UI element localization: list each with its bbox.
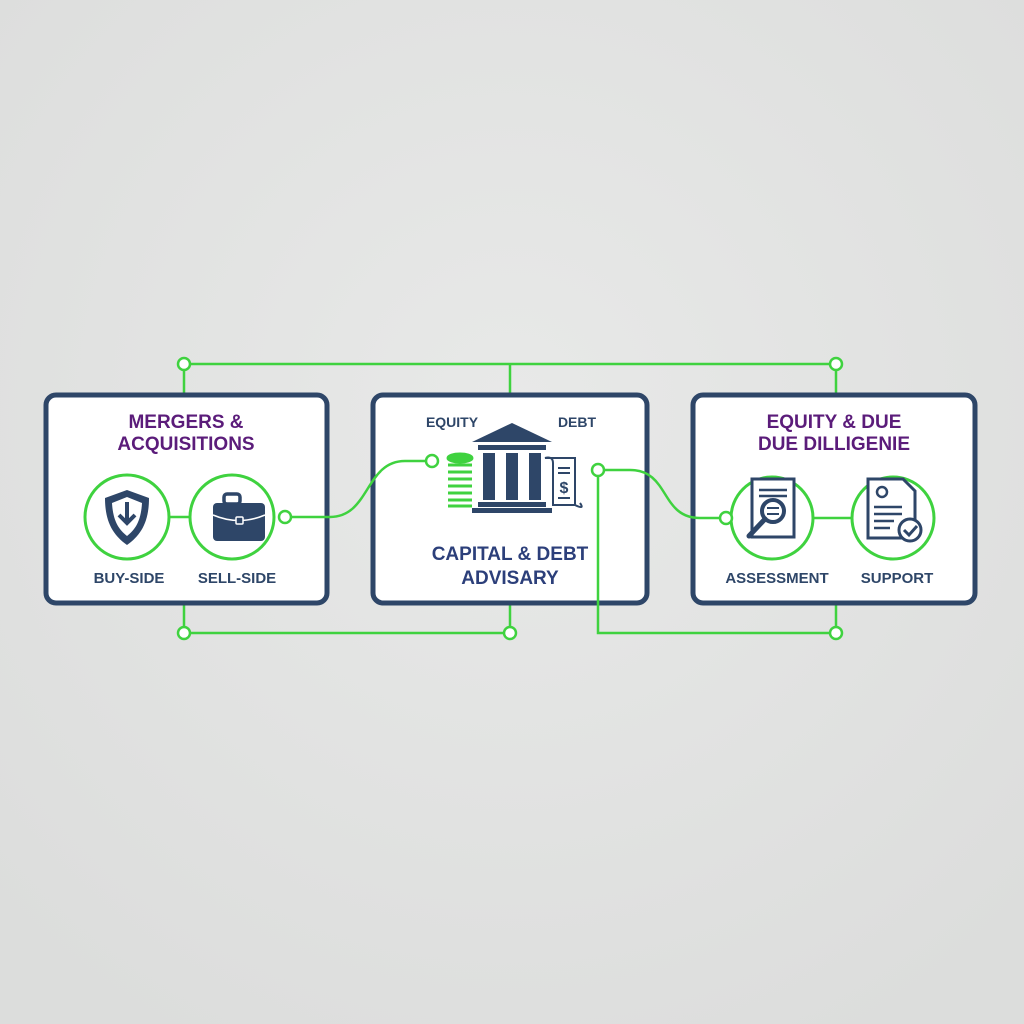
heading: capital & debt advisary: CAPITAL & DEBT: [432, 544, 589, 565]
panel: equity & due diligence: ASSESSMENT: [725, 570, 829, 587]
panel: mergers & acquisitions: [46, 395, 327, 603]
icon: debt scroll: $: [560, 480, 569, 497]
heading: mergers: MERGERS &: [128, 412, 244, 433]
label: buy-side: BUY-SIDE: [94, 570, 164, 587]
panel: capital & debt advisory: EQUITY: [426, 414, 479, 430]
label: sell-side: SELL-SIDE: [198, 570, 276, 587]
icon: bank: [472, 423, 552, 513]
panel: equity & due diligence: SUPPORT: [861, 570, 933, 587]
icon: debt scroll: [545, 458, 582, 507]
icon: assessment: [731, 477, 813, 559]
panel: mergers & acquisitions: ACQUISITIONS: [117, 434, 255, 455]
connector nodes: [178, 358, 842, 639]
panel: capital & debt advisory: [373, 395, 647, 603]
icon: shield buy-side: [85, 475, 169, 559]
panel: equity & due diligence: [693, 395, 975, 603]
icon: coins: [448, 454, 472, 506]
panel: capital & debt advisory: ADVISARY: [461, 568, 559, 589]
panel: equity & due diligence: EQUITY & DUE: [767, 412, 901, 433]
icon: support document: [852, 477, 934, 559]
connector curves across panels: [291, 461, 836, 633]
connector lines: [184, 364, 836, 633]
panel: equity & due diligence: DUE DILLIGENIE: [758, 434, 910, 455]
icon: briefcase sell-side: [190, 475, 274, 559]
panel: capital & debt advisory: DEBT: [558, 414, 596, 430]
